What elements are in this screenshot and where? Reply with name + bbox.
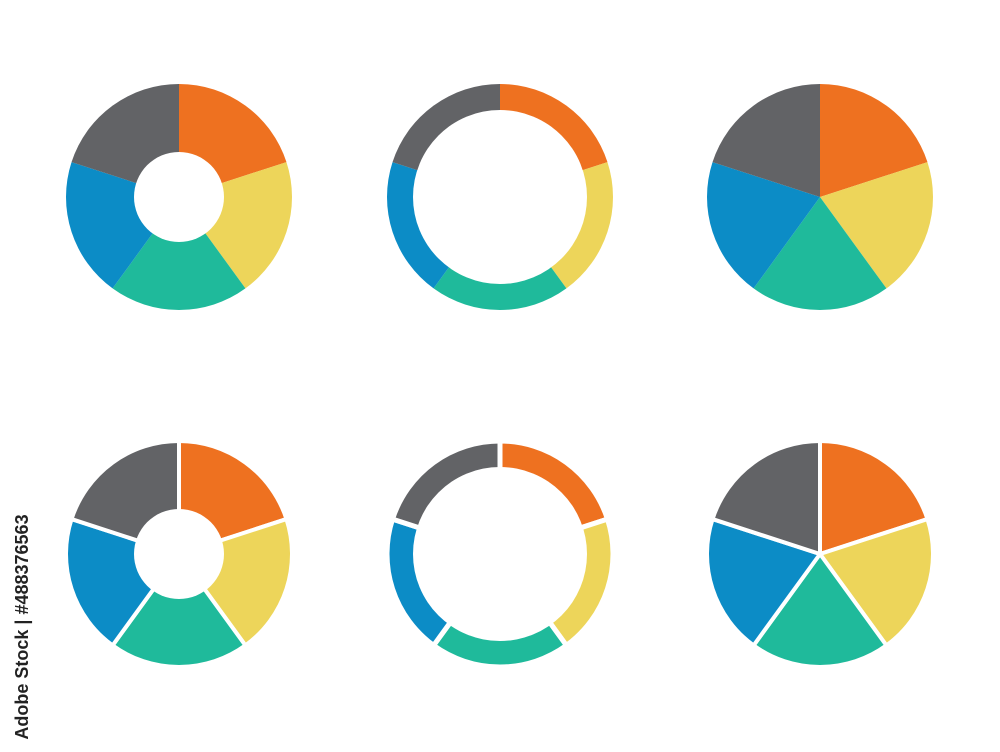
chart: thin ring bottom-middle with gaps xyxy=(387,441,613,667)
chart: pie bottom-right with gaps xyxy=(707,441,933,667)
chart: donut bottom-left with gaps xyxy=(66,441,292,667)
chart: donut top-left xyxy=(66,84,292,310)
chart: pie top-right xyxy=(707,84,933,310)
chart: thin ring top-middle xyxy=(387,84,613,310)
watermark text: Adobe Stock id: Adobe Stock | #488376563 xyxy=(12,514,32,740)
